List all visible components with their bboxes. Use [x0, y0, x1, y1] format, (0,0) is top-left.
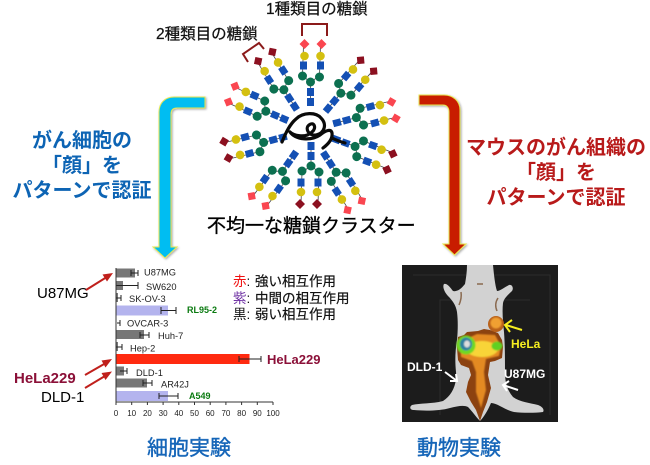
legend: interaction strength	[233, 274, 350, 322]
x axis numbers: 90	[253, 409, 262, 418]
x axis numbers: 80	[237, 409, 247, 418]
fluorescence	[457, 329, 503, 421]
text: recognise cancer cell face by pattern: パターンで認証	[12, 179, 152, 202]
legend: interaction strength: 弱い相互作用	[255, 307, 336, 322]
text: recognise cancer cell face by pattern	[12, 128, 152, 202]
animal image: mouse fluorescence	[402, 265, 558, 422]
x axis numbers: 100	[266, 409, 280, 418]
heading: animal experiment: 動物実験	[417, 437, 501, 460]
text: recognise cancer cell face by pattern: 「顔」を	[42, 154, 122, 177]
text: recognise mouse cancer tissue face by pattern: 「顔」を	[516, 161, 596, 184]
mouse body	[410, 265, 544, 421]
bracket: second glycan type	[243, 43, 264, 62]
label: U87MG: U87MG	[504, 367, 545, 381]
cell line labels: AR42J	[161, 380, 189, 390]
x axis numbers: 30	[159, 409, 168, 418]
HeLa tumour	[488, 316, 504, 332]
cell line labels: DLD-1	[136, 368, 163, 378]
yellow arrow	[505, 320, 522, 332]
legend: interaction strength: 赤:	[233, 274, 250, 289]
x axis numbers: 40	[174, 409, 184, 418]
HeLa229 bar label: HeLa229	[267, 352, 320, 367]
text: recognise mouse cancer tissue face by pattern	[466, 135, 646, 209]
left labels and arrows: HeLa229	[14, 370, 76, 387]
label: DLD-1: DLD-1	[407, 360, 443, 374]
green control labels: A549	[189, 391, 211, 401]
cell line labels	[127, 268, 189, 390]
axes	[116, 268, 273, 405]
legend: interaction strength: 紫:	[233, 291, 250, 306]
cell line labels: SW620	[146, 282, 176, 292]
arrow: red, animal experiment	[419, 95, 466, 255]
left labels and arrows: DLD-1	[41, 389, 84, 406]
x axis numbers: 60	[206, 409, 215, 418]
green control labels: RL95-2	[187, 305, 217, 315]
text: recognise cancer cell face by pattern: がん細胞の	[32, 128, 132, 152]
bars	[116, 268, 250, 401]
x axis numbers: 70	[221, 409, 231, 418]
legend: interaction strength: 強い相互作用	[255, 274, 336, 289]
cell line labels: OVCAR-3	[127, 318, 168, 328]
bar chart: cell experiment	[114, 268, 320, 418]
arrow: blue, cell experiment	[153, 97, 205, 258]
x axis numbers	[114, 409, 280, 418]
label: first glycan type: 1種類目の糖鎖	[266, 0, 368, 18]
x axis numbers: 10	[127, 409, 137, 418]
bracket: first glycan type	[302, 24, 327, 36]
glycan cluster diagram	[218, 39, 402, 217]
error bars	[116, 270, 261, 399]
cell line labels: Hep-2	[130, 344, 155, 354]
cell line labels: U87MG	[144, 268, 176, 278]
white arrows	[445, 372, 518, 391]
text: recognise mouse cancer tissue face by pattern: パターンで認証	[486, 186, 626, 209]
scaffold scribble	[282, 114, 345, 148]
caption: heterogeneous glycan cluster: 不均一な糖鎖クラスター	[207, 215, 416, 237]
x axis numbers: 20	[143, 409, 152, 418]
heading: cell experiment: 細胞実験	[147, 437, 231, 460]
label: HeLa: HeLa	[511, 337, 541, 351]
green control labels	[187, 305, 217, 401]
legend: interaction strength: 黒:	[233, 307, 250, 322]
left labels and arrows	[14, 273, 113, 406]
legend: interaction strength: 中間の相互作用	[255, 291, 350, 306]
label: second glycan type: 2種類目の糖鎖	[156, 25, 258, 43]
cell line labels: SK-OV-3	[129, 294, 166, 304]
cell line labels: Huh-7	[158, 331, 183, 341]
x axis numbers: 50	[190, 409, 199, 418]
left labels and arrows: U87MG	[37, 285, 89, 302]
x axis numbers: 0	[114, 409, 119, 418]
text: recognise mouse cancer tissue face by pattern: マウスのがん組織の	[466, 135, 646, 159]
